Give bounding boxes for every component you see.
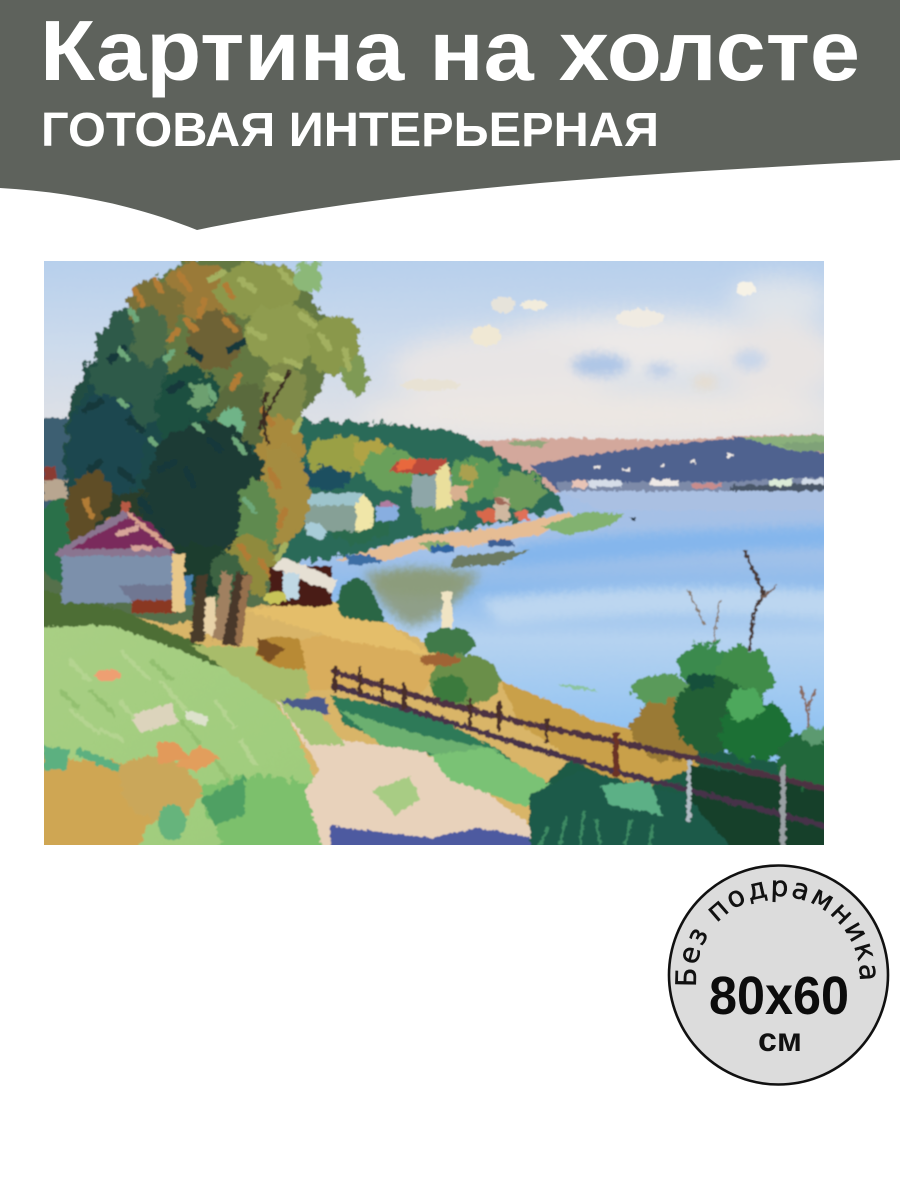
wooden fence [334,667,844,845]
yellow house [390,459,467,510]
grass brush strokes [70,650,256,766]
foliage dabs [85,270,349,574]
painting: lakeside landscape [44,261,824,845]
pale blue house [304,493,398,540]
ground base [44,541,301,626]
foreground greenery [330,681,824,845]
subtitle: ГОТОВАЯ ИНТЕРЬЕРНАЯ [41,104,659,157]
shore houses [476,497,530,522]
badge circle [669,866,888,1084]
hillside ground [44,590,570,845]
unit: см [758,1021,802,1058]
distant hills [478,432,824,494]
curved label: Без подрамника [675,880,876,985]
boathouse [263,557,386,622]
forest and far shore [280,420,636,568]
birch trees [65,255,367,646]
sandy path [275,700,532,845]
left distant forest [44,416,72,583]
size value: 80x60 [709,966,849,1026]
banner shape [0,0,900,230]
fence posts [335,667,783,845]
lake [298,488,824,764]
small bush by shore [420,628,500,706]
sky [44,261,824,445]
fence rails [334,672,844,831]
title: Картина на холсте [40,4,860,99]
beach and point [335,512,636,568]
tree foliage [65,255,367,597]
badge: size without stretcher [668,864,890,1086]
tree trunks and branches [258,370,290,445]
waterside bush [632,550,844,786]
shed in front of trees [54,501,216,635]
header banner [0,0,900,230]
